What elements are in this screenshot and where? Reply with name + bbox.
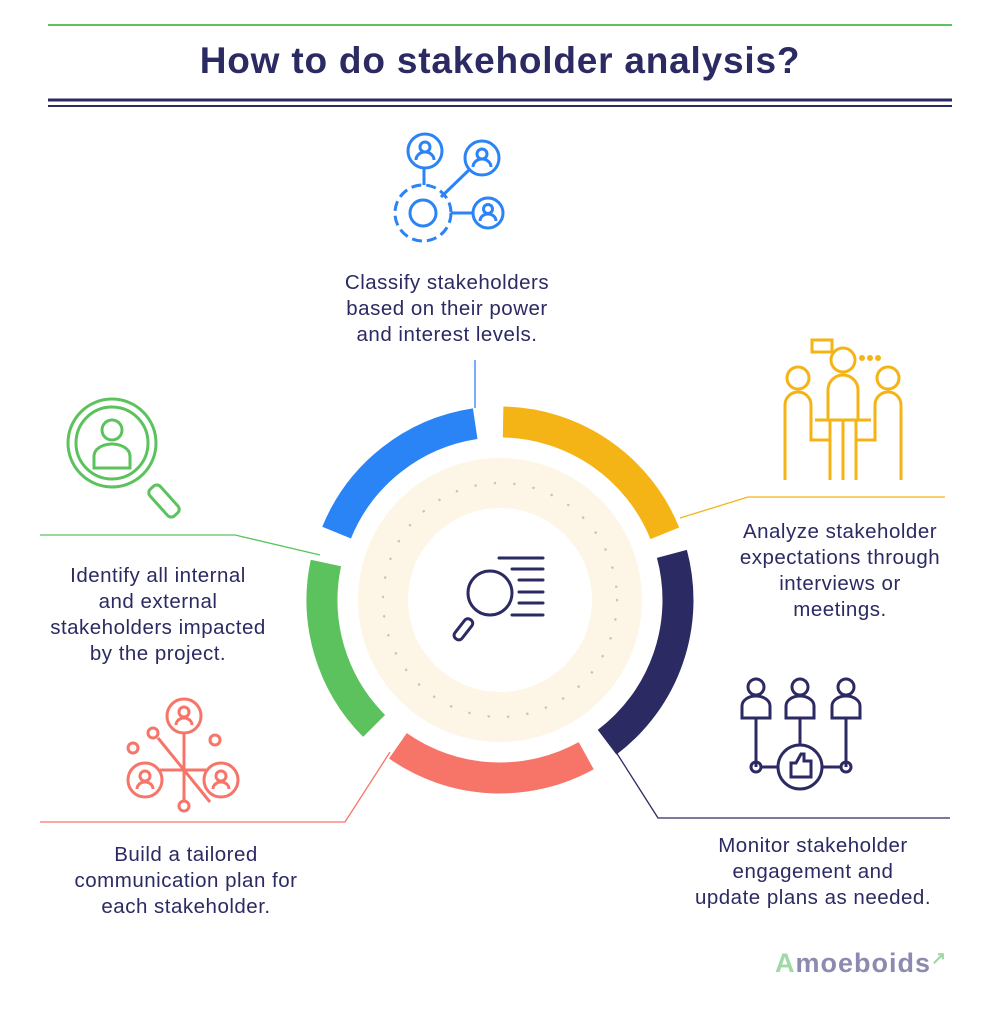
text: monitor: engagement and [733, 860, 893, 883]
icon: central magnifier [452, 558, 543, 642]
text: analyze [740, 520, 940, 621]
text: build: communication plan for [75, 869, 297, 892]
text: monitor: Monitor stakeholder [718, 834, 908, 857]
icon: gear network [395, 134, 503, 241]
text: analyze: Analyze stakeholder [743, 520, 937, 543]
icon: team approval [742, 679, 860, 789]
text: classify: Classify stakeholders [345, 271, 549, 294]
text: identify: by the project. [90, 642, 226, 665]
text: identify: Identify all internal [70, 564, 246, 587]
text: build: each stakeholder. [101, 895, 271, 918]
title: How to do stakeholder analysis? [200, 40, 800, 81]
text: classify: based on their power [346, 297, 548, 320]
text: identify: and external [99, 590, 217, 613]
text: build: Build a tailored [114, 843, 258, 866]
connectors [40, 360, 950, 822]
text: identify: stakeholders impacted [50, 616, 266, 639]
icon: network people [128, 699, 238, 811]
icon: magnifier person [68, 399, 181, 519]
text: identify [50, 564, 266, 665]
text: classify [345, 271, 549, 346]
logo: Amoeboids↗ [775, 948, 947, 978]
text: classify: and interest levels. [357, 323, 537, 346]
text: monitor [695, 834, 931, 909]
text: analyze: expectations through [740, 546, 940, 569]
text: monitor: update plans as needed. [695, 886, 931, 909]
text: analyze: interviews or [779, 572, 901, 595]
icon: meeting people [785, 340, 901, 480]
text: build [75, 843, 297, 918]
text: analyze: meetings. [793, 598, 887, 621]
center ring [322, 422, 678, 778]
